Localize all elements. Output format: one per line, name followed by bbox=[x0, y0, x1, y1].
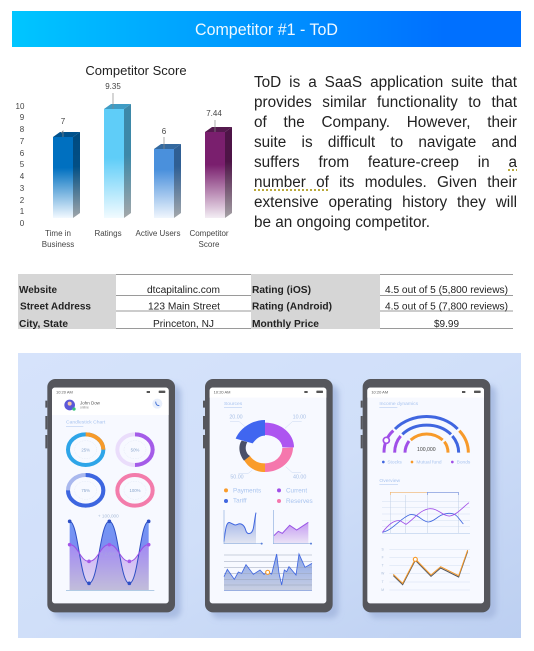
bar: competitor score: Score bbox=[199, 240, 220, 249]
price line chart: F bbox=[382, 556, 384, 560]
row: street address and Android rating: 4.5 out of 5 (7,800 reviews) bbox=[385, 302, 508, 312]
phone 1: candlestick dashboard: 10:20 AM bbox=[56, 390, 73, 395]
row: city and monthly price: Monthly Price bbox=[252, 319, 319, 330]
price line chart: W bbox=[381, 572, 385, 576]
bar: ratings: Ratings bbox=[94, 229, 122, 238]
row: city and monthly price: Princeton, NJ bbox=[153, 319, 214, 330]
bar: time in business bbox=[42, 117, 80, 249]
y axis labels: 4 bbox=[20, 172, 25, 181]
y axis labels: 0 bbox=[20, 219, 25, 228]
description paragraph: of the Company. However, their bbox=[254, 114, 517, 131]
row: city and monthly price bbox=[19, 319, 459, 330]
bar: ratings: 9.35 bbox=[105, 82, 121, 91]
row: street address and Android rating: Street Address bbox=[20, 302, 91, 312]
overview line chart bbox=[382, 492, 470, 533]
bar: competitor score: Competitor bbox=[189, 229, 229, 238]
contact header bbox=[64, 399, 162, 411]
row: website and iOS rating: 4.5 out of 5 (5,800 reviews) bbox=[385, 285, 508, 296]
gauge legend: Bonds bbox=[457, 460, 471, 466]
bar: time in business: 7 bbox=[61, 117, 66, 126]
info table bbox=[18, 274, 513, 330]
row: street address and Android rating bbox=[20, 302, 508, 312]
y axis labels: 9 bbox=[20, 113, 25, 122]
row: website and iOS rating: Website bbox=[19, 285, 57, 296]
y axis labels: 2 bbox=[20, 196, 25, 205]
row: street address and Android rating: 123 Main Street bbox=[148, 302, 220, 312]
mini chart right bbox=[273, 510, 312, 545]
phone 2: sources dashboard: 10:20 AM bbox=[214, 390, 231, 395]
title banner: Competitor #1 - ToD bbox=[195, 21, 338, 39]
contact header: John Dow bbox=[80, 400, 101, 405]
gauge legend: Stocks bbox=[387, 460, 402, 466]
phone 1: candlestick dashboard: Candlestick Chart bbox=[66, 420, 106, 426]
y axis labels: 7 bbox=[20, 137, 25, 146]
phone 3: income dynamics dashboard bbox=[361, 379, 496, 618]
description paragraph: extensive operating history they will bbox=[254, 194, 517, 211]
row: website and iOS rating: Rating (iOS) bbox=[252, 285, 311, 296]
price line chart: T bbox=[382, 580, 384, 584]
legend: Reserves bbox=[286, 498, 313, 505]
row: website and iOS rating: dtcapitalinc.com bbox=[147, 285, 220, 296]
price line chart: S bbox=[382, 548, 385, 552]
segmented donut chart: 10.00 bbox=[293, 415, 306, 421]
gauge legend bbox=[382, 460, 471, 466]
y axis labels: 8 bbox=[20, 125, 25, 134]
concentric arc gauge bbox=[383, 416, 468, 453]
phone 3: income dynamics dashboard: Overview bbox=[379, 478, 401, 484]
row: street address and Android rating: Rating (Android) bbox=[252, 302, 332, 312]
contact header: online bbox=[80, 406, 89, 410]
bar: ratings bbox=[94, 82, 131, 238]
phone 3: income dynamics dashboard: 10:20 AM bbox=[371, 390, 388, 395]
gauge legend: Mutual fund bbox=[416, 460, 442, 466]
wave area chart: + 100,000 bbox=[98, 513, 119, 518]
row: website and iOS rating bbox=[19, 285, 508, 296]
wave area chart: < 2,000 bbox=[100, 551, 117, 556]
legend: Payments bbox=[233, 488, 261, 495]
y axis labels: 1 bbox=[20, 207, 25, 216]
bar: active users: Active Users bbox=[136, 229, 180, 238]
description paragraph: be an ongoing competitor. bbox=[254, 214, 430, 231]
donut: 75%: 75% bbox=[81, 488, 90, 493]
donut: 50%: 50% bbox=[131, 447, 139, 452]
segmented donut chart: 40.00 bbox=[293, 474, 306, 480]
phone 2: sources dashboard: Sources bbox=[224, 401, 243, 407]
bar chart: competitor score bbox=[16, 63, 232, 249]
bar: active users bbox=[136, 127, 181, 238]
bar: competitor score bbox=[189, 109, 232, 249]
description paragraph: number of its modules. Given their bbox=[254, 174, 517, 191]
y axis labels: 3 bbox=[20, 184, 25, 193]
price line chart bbox=[381, 548, 470, 592]
row: city and monthly price: City, State bbox=[19, 319, 68, 330]
row: city and monthly price: $9.99 bbox=[434, 319, 459, 330]
wave area chart bbox=[66, 513, 154, 590]
legend: Current bbox=[286, 488, 307, 495]
legend bbox=[224, 488, 313, 505]
price line chart: M bbox=[381, 588, 384, 592]
phone 3: income dynamics dashboard: Income dynamics bbox=[379, 401, 419, 407]
description paragraph bbox=[254, 74, 517, 231]
chart title: Competitor Score bbox=[85, 63, 187, 78]
y axis labels bbox=[16, 102, 25, 228]
segmented donut chart: 50.00 bbox=[230, 475, 244, 481]
bottom line chart bbox=[224, 554, 312, 591]
description paragraph: ToD is a SaaS application suite that bbox=[254, 74, 517, 91]
donut: 50% bbox=[117, 434, 153, 465]
concentric arc gauge: 100,000 bbox=[417, 447, 436, 453]
price line chart: T bbox=[382, 564, 384, 568]
donut: 25%: 25% bbox=[81, 447, 90, 452]
segmented donut chart: 20.00 bbox=[229, 415, 243, 421]
y axis labels: 5 bbox=[20, 160, 25, 169]
phone 2: sources dashboard bbox=[203, 379, 339, 618]
description paragraph: suffers from feature-creep in a bbox=[254, 154, 517, 171]
donut: 100%: 100% bbox=[129, 488, 141, 493]
legend: Tariff bbox=[233, 498, 247, 505]
image panel: app screenshots bbox=[18, 353, 521, 638]
bar: active users: 6 bbox=[162, 127, 167, 136]
y axis labels: 10 bbox=[16, 102, 25, 111]
bar: time in business: Time in bbox=[45, 229, 71, 238]
phone 1: candlestick dashboard bbox=[45, 379, 181, 618]
segmented donut chart bbox=[229, 415, 306, 481]
description paragraph: provides similar functionality to that bbox=[254, 94, 517, 111]
description paragraph: suite is difficult to navigate and bbox=[254, 134, 517, 151]
y axis labels: 6 bbox=[20, 149, 25, 158]
title banner bbox=[12, 11, 521, 47]
bar: time in business: Business bbox=[42, 240, 74, 249]
bar: competitor score: 7.44 bbox=[206, 109, 222, 118]
donut: 75% bbox=[68, 475, 103, 506]
mini chart left bbox=[224, 510, 263, 545]
donut: 100% bbox=[117, 475, 153, 506]
donut: 25% bbox=[68, 434, 103, 465]
